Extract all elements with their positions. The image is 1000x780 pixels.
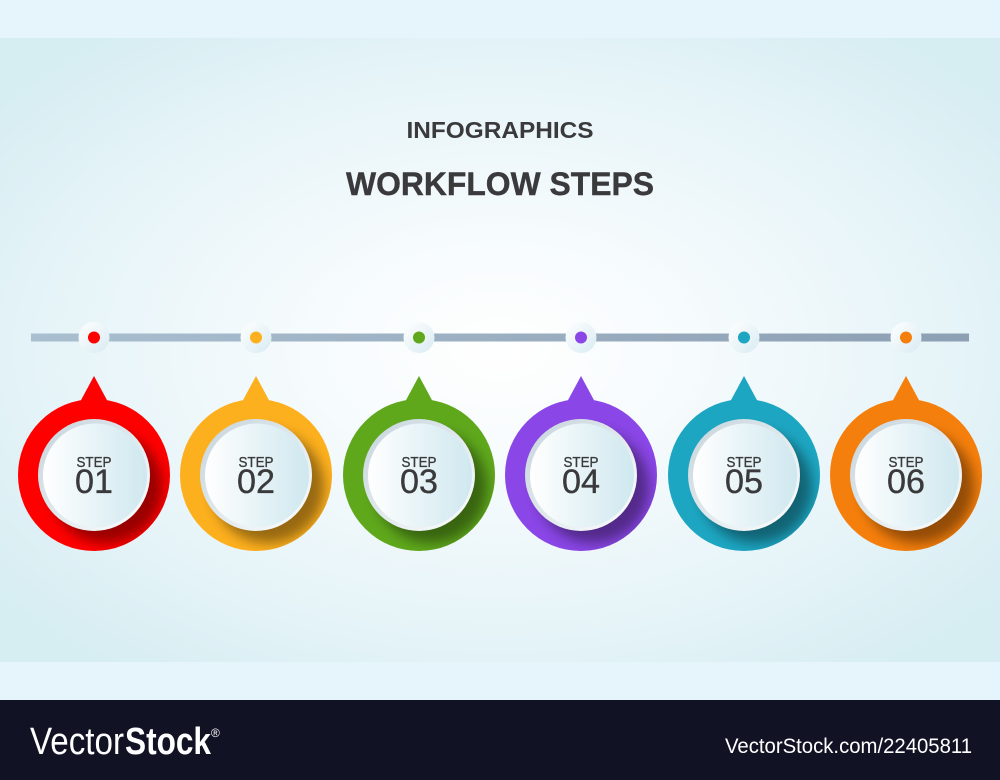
footer logo: ®	[211, 726, 220, 740]
footer bar	[0, 700, 1000, 780]
inner disc 1	[38, 419, 150, 531]
step 4	[505, 322, 657, 551]
pin 6	[830, 376, 982, 551]
label 5: 05	[725, 463, 763, 501]
label 6: 06	[887, 463, 925, 501]
timeline node 4	[566, 322, 596, 353]
pin 5	[668, 376, 820, 551]
label 2: 02	[237, 463, 275, 501]
main panel	[0, 38, 1000, 662]
pin 4	[505, 376, 657, 551]
step 2	[180, 322, 332, 551]
pin 2	[180, 376, 332, 551]
label 2: STEP	[238, 454, 274, 471]
inner disc 2	[200, 419, 312, 531]
timeline node 3	[404, 322, 434, 353]
timeline node 2	[240, 322, 272, 353]
inner disc 4	[525, 419, 637, 531]
heading: infographics: INFOGRAPHICS	[406, 117, 594, 143]
timeline bar	[31, 334, 969, 342]
label 3: STEP	[402, 454, 436, 471]
timeline node 5	[728, 322, 760, 353]
timeline node 6	[890, 322, 922, 353]
label 5: STEP	[726, 454, 762, 471]
label 6: STEP	[888, 454, 924, 471]
step 6	[830, 322, 982, 551]
label 1: 01	[75, 463, 113, 501]
pin 3	[343, 376, 495, 551]
footer url: VectorStock.com/22405811	[725, 735, 972, 758]
footer logo: Stock	[125, 721, 212, 763]
label 3: 03	[400, 463, 438, 501]
pin 1	[18, 376, 170, 551]
step 1	[18, 322, 170, 551]
label 4: 04	[562, 463, 600, 501]
step 3	[343, 322, 495, 551]
label 4: STEP	[564, 454, 598, 471]
footer logo	[30, 721, 220, 763]
inner disc 3	[363, 419, 475, 531]
label 1: STEP	[76, 454, 112, 471]
footer logo: Vector	[30, 721, 124, 763]
inner disc 5	[688, 419, 800, 531]
step 5	[668, 322, 820, 551]
title: workflow steps: WORKFLOW STEPS	[346, 166, 654, 202]
timeline node 1	[78, 322, 110, 353]
inner disc 6	[850, 419, 962, 531]
